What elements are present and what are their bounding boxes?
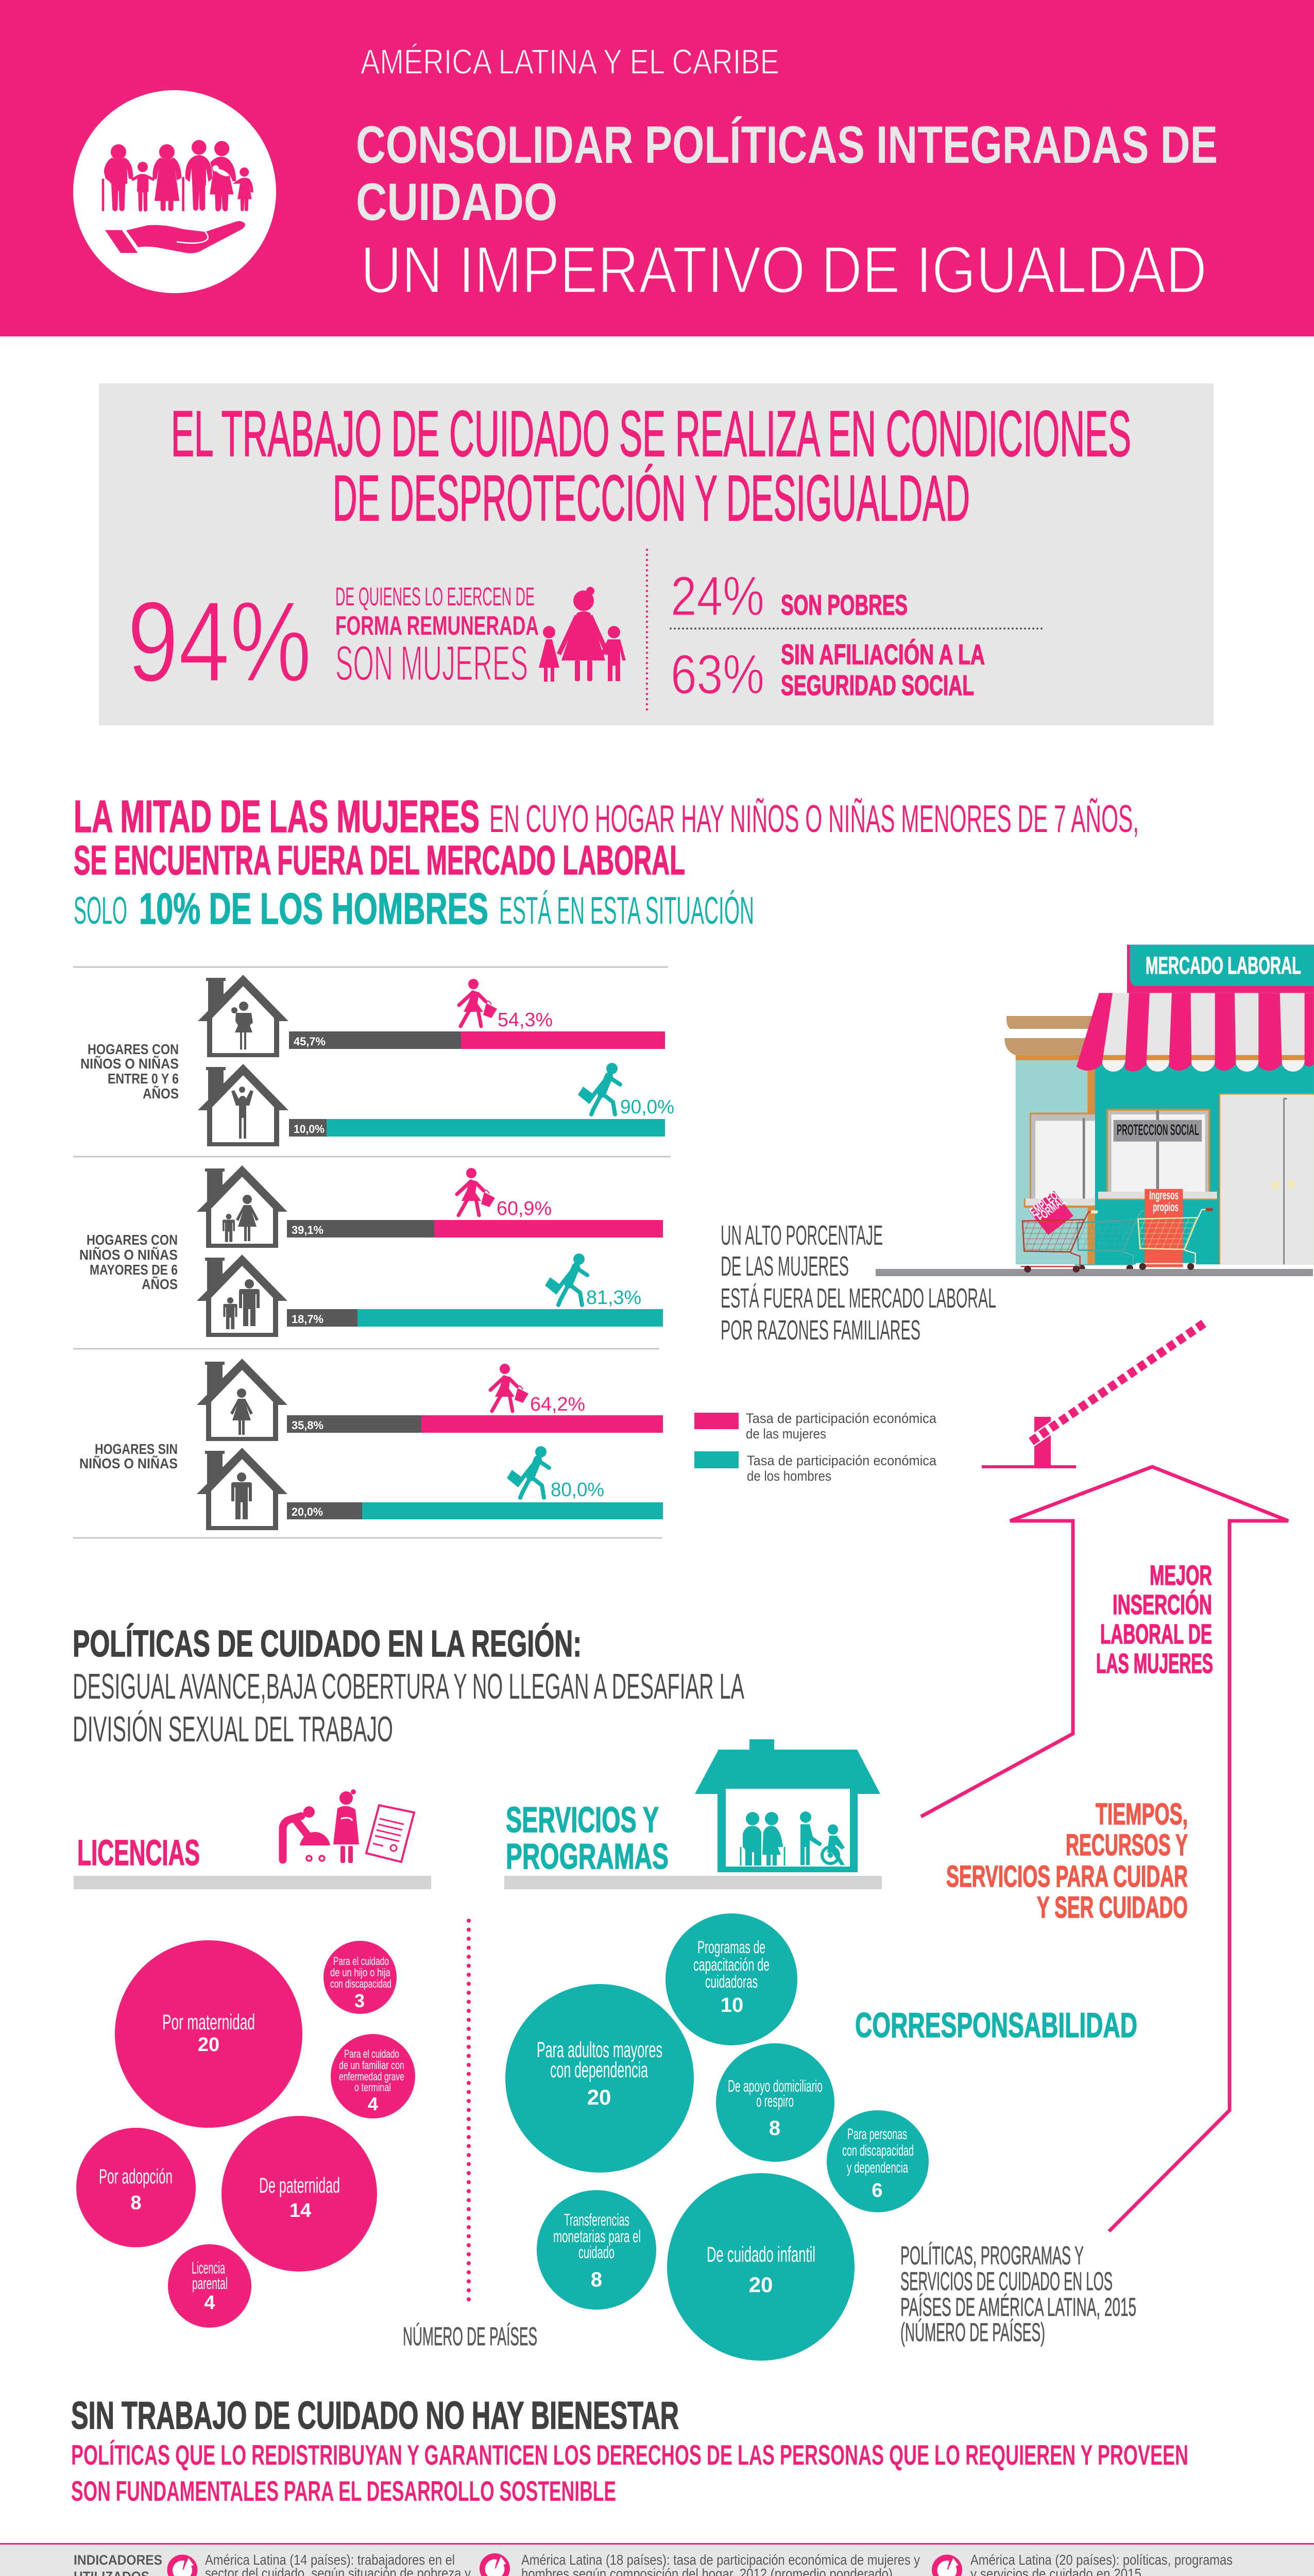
row: men, no children: 80,0% [551,1479,604,1501]
icon: parent with stroller [283,1806,330,1861]
chart caption: POLÍTICAS, PROGRAMAS Y [900,2241,1084,2270]
row: men, no children [197,1446,663,1530]
row label: no children [79,1441,178,1471]
bubble: cuidado infantil: 20 [749,2273,773,2297]
text: high percentage of women out of labour market: UN ALTO PORCENTAJE [721,1220,883,1251]
stat text: seguridad social: SEGURIDAD SOCIAL [781,669,974,701]
text: better labour insertion: INSERCIÓN [1113,1589,1212,1620]
bubble: programas de capacitación: capacitación de [693,1955,770,1975]
illustration: labour market store: PROTECCION SOCIAL [1117,1122,1199,1139]
bubble: hijo con discapacidad [323,1941,397,2014]
indicator 3 [932,2552,1236,2576]
row: men, children over 6 [197,1253,663,1337]
bubble: licencia parental: 4 [204,2292,215,2314]
indicators heading [74,2552,162,2576]
legend: de las mujeres [746,1426,826,1442]
row label: 0 to 6: HOGARES CON [88,1041,179,1057]
licencias heading: LICENCIAS [77,1833,200,1873]
servicios heading: SERVICIOS Y [506,1800,659,1840]
row label: over 6: AÑOS [142,1276,178,1292]
closing statement: SON FUNDAMENTALES PARA EL DESARROLLO SOSTENIBLE [71,2475,616,2507]
bubble: familiar con enfermedad: o terminal [354,2081,391,2094]
bubble: apoyo domiciliario [716,2043,834,2162]
bubble: por maternidad [115,1940,302,2128]
row: women, children 0 to 6: 45,7% [294,1035,326,1048]
bubble: licencia parental: Licencia [192,2259,225,2277]
row: men, children 0 to 6 [198,1063,674,1146]
chart caption: SERVICIOS DE CUIDADO EN LOS [900,2267,1113,2296]
bubble: familiar con enfermedad: Para el cuidado [344,2047,399,2060]
stat text 2: FORMA REMUNERADA [335,611,539,641]
row label: 0 to 6: NIÑOS O NIÑAS [80,1056,179,1072]
text: better labour insertion: MEJOR [1150,1560,1212,1591]
stat text 3: SON MUJERES [335,636,528,691]
sign: empleo formal: EMPLEO [1027,1189,1061,1219]
panel: indicators [0,2543,1314,2576]
icon: care home [695,1739,880,1872]
shopping cart: cream [1136,1208,1213,1270]
indicator 2 [480,2552,920,2576]
servicios heading: PROGRAMAS [506,1836,669,1876]
text: time, resources and services: Y SER CUIDADO [1037,1891,1188,1924]
stat text: sin afiliación: SIN AFILIACIÓN A LA [781,638,985,670]
text: high percentage of women out of labour market [721,1220,996,1346]
bubble: apoyo domiciliario: 8 [769,2117,780,2140]
stat 24%: 24% [671,565,764,627]
stat text 1: DE QUIENES LO EJERCEN DE [335,582,535,611]
row: women, no children: 64,2% [530,1394,585,1415]
indicator 1: América Latina (14 países): trabajadores en el [205,2552,455,2568]
arrow: from care policies up to the labour market [921,1467,1288,2231]
bubble: cuidado infantil: De cuidado infantil [707,2242,815,2266]
chart: economic participation by household type [73,967,674,1538]
bubble: discapacidad y dependencia: y dependencia [847,2159,908,2176]
bubble: por adopción [76,2128,196,2247]
bubble: de paternidad: 14 [289,2200,311,2222]
row label: over 6: NIÑOS O NIÑAS [79,1247,178,1263]
bubble: adultos mayores [505,1984,694,2173]
row label: over 6: HOGARES CON [87,1232,178,1248]
bubble: transferencias monetarias: cuidado [578,2243,615,2262]
row: men, no children: 20,0% [292,1505,323,1518]
title line 2: CUIDADO [356,173,557,231]
bubble: transferencias monetarias: monetarias para el [553,2227,641,2246]
bubble: de paternidad [221,2116,377,2272]
stat text: son pobres: SON POBRES [781,589,908,621]
bubble: apoyo domiciliario: De apoyo domiciliario [728,2077,823,2095]
section heading: half of women: ESTÁ EN ESTA SITUACIÓN [499,889,754,932]
chart caption [900,2241,1136,2347]
illustration: labour market store [876,945,1314,1276]
text: high percentage of women out of labour market: DE LAS MUJERES [721,1251,849,1282]
ground [876,1269,1313,1276]
legend [694,1411,937,1484]
text: better labour insertion: LAS MUJERES [1096,1648,1213,1679]
indicator 2: América Latina (18 países): tasa de participación económica de mujeres y [521,2552,920,2568]
bubble: programas de capacitación [665,1913,797,2045]
stat 94%: 94% [127,578,312,706]
text: time, resources and services [946,1798,1188,1924]
row: women, children over 6: 60,9% [497,1198,552,1219]
bubble: adultos mayores: con dependencia [550,2058,648,2082]
row: men, children 0 to 6: 90,0% [620,1096,674,1118]
text: better labour insertion [1096,1560,1213,1679]
row label: 0 to 6 [80,1041,179,1101]
section heading: half of women: SE ENCUENTRA FUERA DEL MERCADO LABORAL [74,837,685,883]
icon: raised barrier [982,1322,1206,1468]
sign: ingresos propios: propios [1153,1200,1179,1214]
bubble: programas de capacitación: Programas de [697,1938,765,1957]
stat 63%: 63% [671,643,764,705]
divider: horizontal dotted [671,628,1044,630]
header band [0,0,1314,336]
bubble: familiar con enfermedad [331,2034,415,2119]
bubble: familiar con enfermedad: de un familiar con [339,2059,404,2072]
bubble: programas de capacitación: 10 [721,1994,743,2016]
section heading: half of women: LA MITAD DE LAS MUJERES [74,791,480,842]
text: high percentage of women out of labour market: POR RAZONES FAMILIARES [721,1315,920,1346]
row label: 0 to 6: ENTRE 0 Y 6 [108,1071,179,1087]
caption: número de países: NÚMERO DE PAÍSES [403,2322,537,2351]
bubble: discapacidad y dependencia: 6 [872,2180,883,2201]
panel: licencias [74,1789,431,2328]
region label: AMÉRICA LATINA Y EL CARIBE [361,42,779,81]
sign: empleo formal: FORMAL [1034,1194,1068,1225]
bubble: por adopción: 8 [130,2192,142,2214]
bubble: adultos mayores: Para adultos mayores [537,2038,662,2062]
section heading: care policies in the region [73,1623,744,1749]
icon: woman with two children [539,587,626,682]
shopping cart: red [1021,1210,1098,1273]
row label: no children: NIÑOS O NIÑAS [79,1455,178,1471]
text: time, resources and services: SERVICIOS PARA CUIDAR [946,1860,1188,1893]
row: women, children over 6 [197,1165,663,1248]
row: women, children 0 to 6: 54,3% [498,1009,553,1031]
row: men, children over 6: 81,3% [586,1287,641,1309]
chart caption: PAÍSES DE AMÉRICA LATINA, 2015 [900,2293,1136,2321]
bubble: transferencias monetarias [537,2190,656,2310]
text: high percentage of women out of labour market: ESTÁ FUERA DEL MERCADO LABORAL [721,1283,996,1314]
bubble: transferencias monetarias: 8 [591,2268,602,2291]
bubble: programas de capacitación: cuidadoras [705,1972,758,1992]
sign: ingresos propios: Ingresos [1149,1189,1179,1202]
bubble: por adopción: Por adopción [99,2165,173,2188]
sign: empleo formal [1027,1189,1073,1235]
bubble: por maternidad: Por maternidad [162,2010,255,2034]
indicator 1 [167,2552,483,2576]
row: women, no children [197,1359,663,1441]
bubble: discapacidad y dependencia [827,2110,929,2212]
closing statement [71,2394,1188,2507]
bubble: apoyo domiciliario: o respiro [756,2092,794,2110]
sign: ingresos propios [1149,1189,1179,1214]
panel: conditions of care work [99,383,1214,725]
bubble: discapacidad y dependencia: con discapacidad [842,2142,914,2159]
divider: dotted between bubble groups [467,1921,471,2307]
bubble: por maternidad: 20 [198,2034,219,2056]
indicators heading: INDICADORES [74,2552,162,2568]
bubble: hijo con discapacidad: Para el cuidado [333,1955,389,1968]
row: women, children over 6: 39,1% [292,1224,323,1236]
bubble: transferencias monetarias: Transferencias [564,2210,629,2229]
icon: document [366,1805,414,1862]
section heading: half of women: 10% DE LOS HOMBRES [139,885,488,934]
bubble: licencia parental: parental [192,2274,228,2293]
row: men, children over 6: 18,7% [292,1313,323,1326]
indicator 3: América Latina (20 países): políticas, programas [970,2552,1233,2568]
chart caption: (NÚMERO DE PAÍSES) [900,2318,1045,2347]
icon: pregnant woman [333,1789,359,1863]
legend: de los hombres [747,1468,831,1484]
row label: over 6: MAYORES DE 6 [90,1262,178,1278]
row: women, children 0 to 6 [198,975,665,1057]
row label: no children: HOGARES SIN [95,1441,178,1457]
text: time, resources and services: RECURSOS Y [1066,1828,1188,1862]
icon: family over open hand [73,90,276,293]
legend: Tasa de participación económica [746,1411,937,1426]
row label: over 6 [79,1232,178,1292]
bubble: familiar con enfermedad: enfermedad grave [339,2070,404,2083]
bubble: hijo con discapacidad: de un hijo o hija [330,1966,391,1979]
bubble: de paternidad: De paternidad [259,2173,340,2197]
section heading: care policies in the region: POLÍTICAS DE CUIDADO EN LA REGIÓN: [73,1623,582,1665]
text: better labour insertion: LABORAL DE [1100,1619,1212,1650]
section heading: half of women [74,791,1139,934]
bubble: licencia parental [168,2244,251,2328]
section heading: care policies in the region: DESIGUAL AVANCE,BAJA COBERTURA Y NO LLEGAN A DESAFIAR LA [73,1666,744,1706]
servicios heading [506,1800,669,1876]
panel: servicios y programas [504,1739,929,2361]
section heading: half of women: SOLO [74,889,127,932]
row label: 0 to 6: AÑOS [143,1086,179,1101]
legend: Tasa de participación económica [747,1453,937,1468]
row: women, no children: 35,8% [292,1419,323,1432]
divider: vertical dotted [646,550,648,714]
section heading: care policies in the region: DIVISIÓN SEXUAL DEL TRABAJO [73,1709,393,1749]
bubble: hijo con discapacidad: 3 [354,1990,365,2011]
bubble: familiar con enfermedad: 4 [368,2093,378,2114]
row: men, children 0 to 6: 10,0% [294,1123,325,1136]
bubble: cuidado infantil [667,2173,855,2361]
bubble: discapacidad y dependencia: Para personas [847,2126,907,2143]
closing statement: SIN TRABAJO DE CUIDADO NO HAY BIENESTAR [71,2394,679,2437]
shopping cart: teal [1075,1211,1145,1272]
bubble: hijo con discapacidad: con discapacidad [330,1977,391,1990]
heading: corresponsabilidad: CORRESPONSABILIDAD [855,2006,1137,2045]
text: time, resources and services: TIEMPOS, [1096,1798,1188,1831]
bubble: adultos mayores: 20 [587,2085,611,2109]
